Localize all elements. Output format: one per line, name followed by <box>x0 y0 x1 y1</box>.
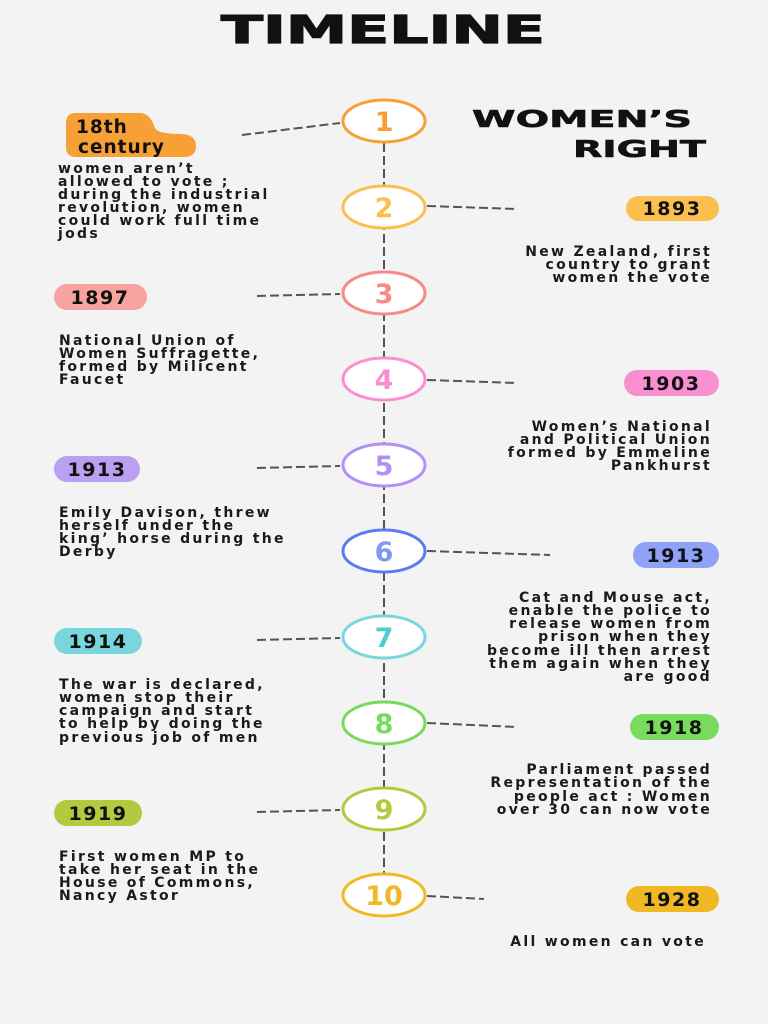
event 3: 1897 <box>71 287 129 309</box>
event 7 <box>54 628 265 746</box>
event 2: women the vote <box>552 270 712 286</box>
event 2: country to grant <box>546 257 712 273</box>
event 7: previous job of men <box>59 730 260 746</box>
event 7: to help by doing the <box>59 716 265 732</box>
event 4: and Political Union <box>520 432 712 448</box>
event 2 <box>525 196 719 286</box>
event 9: Nancy Astor <box>59 888 180 904</box>
event 7: The war is declared, <box>59 677 265 693</box>
event 6: Cat and Mouse act, <box>519 590 712 606</box>
event 10 <box>510 886 719 950</box>
event 3 <box>54 284 260 388</box>
event 2: New Zealand, first <box>525 244 712 260</box>
event 6: 1913 <box>647 545 705 567</box>
event 8: over 30 can now vote <box>497 802 712 818</box>
event 8: people act : Women <box>514 789 712 805</box>
event 9: House of Commons, <box>59 875 255 891</box>
event 8: 1918 <box>645 717 703 739</box>
connectors <box>242 123 550 899</box>
event 3: National Union of <box>59 333 236 349</box>
event 5: 1913 <box>68 459 126 481</box>
numbers: 9 <box>375 795 393 826</box>
circles <box>343 100 425 916</box>
numbers: 8 <box>375 709 393 740</box>
event 8 <box>490 714 719 818</box>
subtitle: WOMEN’S <box>472 107 692 133</box>
event 4: 1903 <box>642 373 700 395</box>
event 6: become ill then arrest <box>487 643 712 659</box>
event 4: Women’s National <box>532 419 712 435</box>
event 1: women aren’t <box>58 161 195 177</box>
event 1: could work full time <box>58 213 261 229</box>
event 3: Women Suffragette, <box>59 346 260 362</box>
numbers: 3 <box>375 279 393 310</box>
subtitle: RIGHT <box>573 137 707 163</box>
event 2: 1893 <box>643 198 701 220</box>
event 5: Emily Davison, threw <box>59 505 272 521</box>
numbers <box>365 107 403 912</box>
event 6: are good <box>624 669 712 685</box>
event 1: revolution, women <box>58 200 245 216</box>
event 8: Parliament passed <box>526 762 712 778</box>
event 6: enable the police to <box>509 603 712 619</box>
event 1: 18th <box>76 117 128 138</box>
event 7: women stop their <box>59 690 235 706</box>
event 5: herself under the <box>59 518 235 534</box>
event 5: king’ horse during the <box>59 531 286 547</box>
event 10: 1928 <box>643 889 701 911</box>
event 6 <box>487 542 719 685</box>
event 3: formed by Milicent <box>59 359 249 375</box>
event 8: Representation of the <box>490 775 712 791</box>
event 1 <box>57 113 270 242</box>
numbers: 4 <box>375 365 393 396</box>
event 4: Pankhurst <box>611 458 712 474</box>
event 1: allowed to vote ; <box>58 174 230 190</box>
numbers: 7 <box>375 623 393 654</box>
event 4 <box>508 370 719 474</box>
title: TIMELINE <box>221 8 545 52</box>
event 9: 1919 <box>69 803 127 825</box>
numbers: 6 <box>375 537 393 568</box>
event 3: Faucet <box>59 372 125 388</box>
event 1: jods <box>57 226 100 242</box>
event 10: All women can vote <box>510 934 706 950</box>
subtitle <box>472 107 707 163</box>
event 5 <box>54 456 286 560</box>
event 9 <box>54 800 260 904</box>
event 4: formed by Emmeline <box>508 445 712 461</box>
numbers: 2 <box>375 193 393 224</box>
event 6: them again when they <box>489 656 712 672</box>
event 1: century <box>78 137 165 158</box>
numbers: 10 <box>365 881 403 912</box>
event 1: during the industrial <box>58 187 270 203</box>
event 6: release women from <box>509 616 712 632</box>
event 7: 1914 <box>69 631 127 653</box>
numbers: 1 <box>375 107 393 138</box>
numbers: 5 <box>375 451 393 482</box>
event 6: prison when they <box>538 629 712 645</box>
event 9: First women MP to <box>59 849 246 865</box>
event 5: Derby <box>59 544 118 560</box>
event 7: campaign and start <box>59 703 254 719</box>
event 9: take her seat in the <box>59 862 260 878</box>
